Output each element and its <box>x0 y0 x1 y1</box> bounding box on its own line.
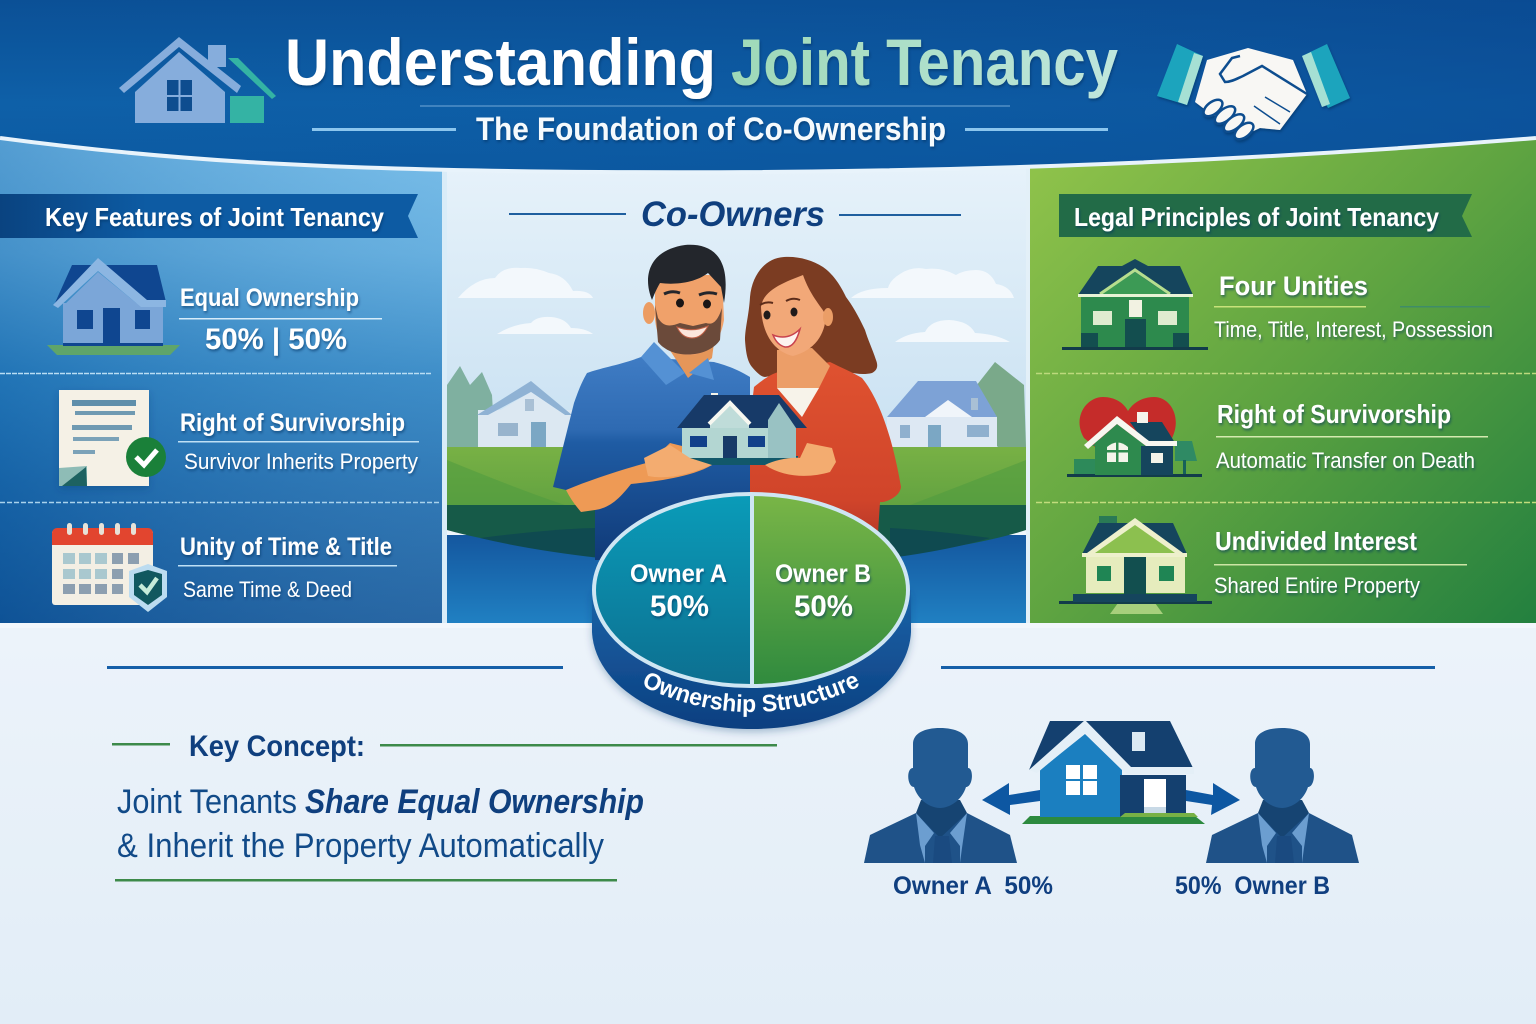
house <box>1022 720 1205 824</box>
subtitle <box>312 111 1108 147</box>
title <box>285 25 1118 99</box>
item: right of survivorship: Right of Survivorship <box>180 409 405 437</box>
icon: cream house <box>1059 516 1212 614</box>
item: right of survivorship legal: Right of Survivorship <box>1217 399 1451 429</box>
item: equal ownership: Equal Ownership <box>180 284 359 312</box>
label: owner B: 50% Owner B <box>1175 872 1330 900</box>
heading: co-owners: Co-Owners <box>641 195 825 234</box>
item: unity of time and title <box>178 533 397 602</box>
icon: calendar with shield <box>52 523 167 612</box>
panel: legal principles of joint tenancy <box>1026 130 1536 623</box>
item: four unities <box>1214 271 1493 342</box>
icon: green house <box>1062 259 1208 350</box>
item: four unities: Four Unities <box>1219 271 1368 301</box>
slice: owner A: 50% <box>650 590 709 623</box>
icon: deed with check <box>59 390 166 486</box>
icon: heart house <box>1067 397 1202 477</box>
item: four unities: Time, Title, Interest, Possession <box>1214 317 1493 342</box>
divider lines <box>107 666 1435 669</box>
icon: blue house <box>47 258 180 355</box>
arrow left <box>982 783 1040 815</box>
panel: key features of joint tenancy <box>0 130 447 623</box>
item: right of survivorship legal <box>1216 399 1488 473</box>
slice: owner B <box>751 493 909 687</box>
background house and trees left <box>447 366 572 447</box>
item: undivided interest: Shared Entire Property <box>1214 573 1420 598</box>
arrow right <box>1186 783 1240 815</box>
item: equal ownership <box>179 284 382 356</box>
banner: legal principles <box>1059 194 1472 237</box>
item: unity of time and title: Unity of Time & Title <box>180 533 392 561</box>
title: Joint Tenancy <box>731 25 1118 99</box>
banner: legal principles: Legal Principles of Joint Tenancy <box>1074 202 1439 232</box>
icon: handshake <box>1157 44 1350 143</box>
text block: key concept <box>112 730 777 882</box>
item: undivided interest <box>1214 526 1467 598</box>
owner A silhouette <box>864 728 1017 863</box>
slice: owner B: Owner B <box>775 560 871 588</box>
owner B silhouette <box>1206 728 1359 863</box>
text block: key concept: Joint Tenants <box>117 783 297 821</box>
panel: center co-owners scene <box>447 130 1026 623</box>
item: right of survivorship legal: Automatic Transfer on Death <box>1216 448 1475 473</box>
woman <box>745 257 901 560</box>
item: undivided interest: Undivided Interest <box>1215 526 1417 556</box>
text block: key concept: Key Concept: <box>189 730 365 763</box>
diagram: owners sharing a house <box>864 720 1359 900</box>
title: Understanding <box>285 25 716 99</box>
text block: key concept: & Inherit the Property Automatically <box>117 827 604 865</box>
clouds <box>458 268 1014 342</box>
subtitle: The Foundation of Co-Ownership <box>476 111 946 147</box>
background house and trees right <box>887 362 1026 447</box>
slice: owner B: 50% <box>794 590 853 623</box>
slice: owner A: Owner A <box>630 560 727 588</box>
miniature house held by the couple <box>670 393 807 465</box>
pie chart: ownership structure <box>588 492 916 736</box>
text block: key concept: Share Equal Ownership <box>305 783 644 821</box>
icon: house logo <box>119 37 276 123</box>
label: owner A: Owner A 50% <box>893 872 1053 900</box>
item: equal ownership: 50% | 50% <box>205 323 347 356</box>
curved label: Ownership Structure <box>644 673 859 717</box>
hands holding the house <box>644 443 836 477</box>
item: right of survivorship <box>178 409 419 474</box>
banner: key features <box>0 194 418 238</box>
slice: owner A <box>593 493 751 687</box>
item: right of survivorship: Survivor Inherits Property <box>184 449 418 474</box>
item: unity of time and title: Same Time & Deed <box>183 577 352 602</box>
man <box>553 245 750 560</box>
banner: key features: Key Features of Joint Tenancy <box>45 202 384 232</box>
header band <box>0 0 1536 172</box>
